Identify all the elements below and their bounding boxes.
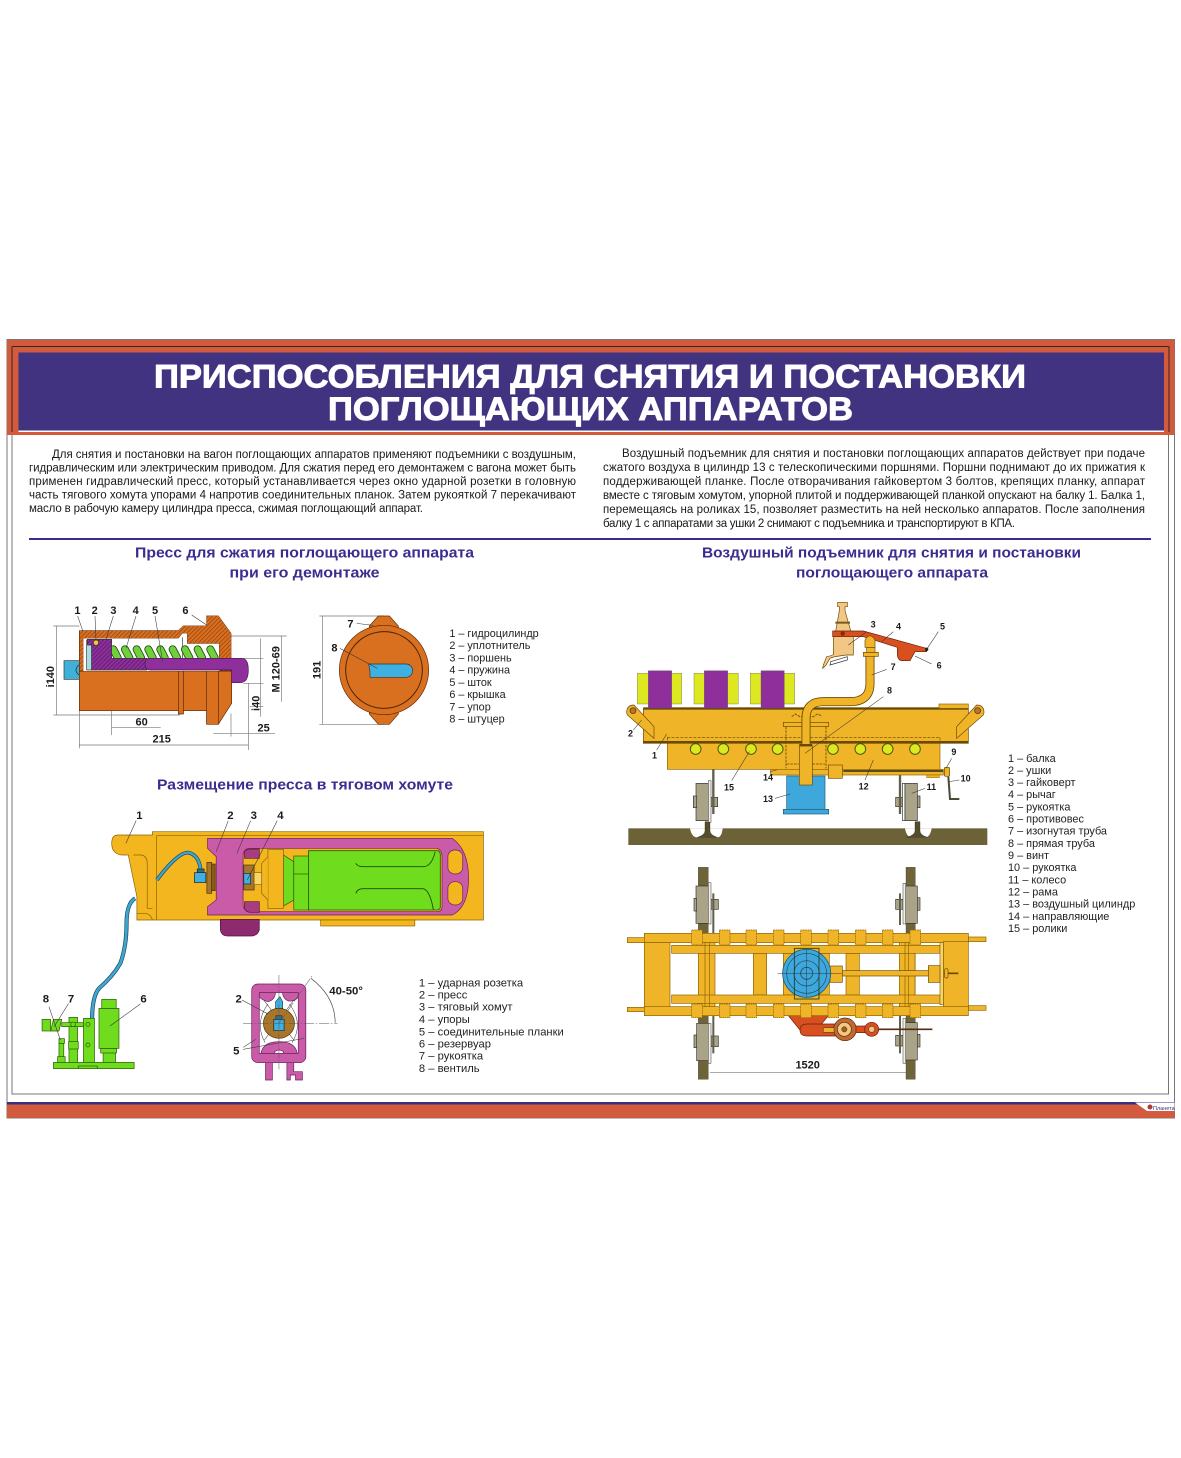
cylinder <box>783 776 829 814</box>
yoke <box>208 838 469 915</box>
yoke window <box>243 848 442 912</box>
text block: intro left: часть тягового хомута упорами 4 напротив соединительных планок. Затем рукояткой 7 перекачивают <box>29 490 577 502</box>
hose and fitting <box>157 853 201 880</box>
panel: hydraulic pump: 8 <box>43 993 49 1005</box>
labels: 1 <box>652 750 657 760</box>
press labels: i40 <box>250 696 262 711</box>
yoke lug <box>220 919 259 936</box>
labels: 9 <box>951 747 956 757</box>
wheels <box>693 783 920 821</box>
labels: 3 <box>251 810 257 822</box>
heading: air lift: поглощающего аппарата <box>796 566 989 582</box>
wheels <box>694 886 920 1061</box>
labels: 4 <box>896 621 901 631</box>
panel: hydraulic pump: 6 <box>140 993 147 1005</box>
panel: yoke cross-section: 5 <box>233 1045 239 1057</box>
legend: air lift: 2 – ушки <box>1008 765 1051 777</box>
press labels: 5 <box>152 605 158 617</box>
legend: press: 3 – поршень <box>449 652 512 664</box>
roller pads <box>692 930 921 1018</box>
legend: press: 6 – крышка <box>449 689 507 701</box>
text block: intro right: Воздушный подъемник для снятия и постановки поглощающих аппаратов действует при подаче <box>622 448 1145 460</box>
posts <box>713 753 900 814</box>
labels <box>628 619 971 804</box>
labels: 7 <box>891 662 896 672</box>
text block: intro left: гидравлическим или электрическим приводом. Для сжатия перед его демонтажем с вагона может быть <box>29 462 576 474</box>
legend: air lift: 8 – прямая труба <box>1008 838 1096 850</box>
coupler body <box>112 832 483 920</box>
text block: intro right: сжатого воздуха в цилиндр 13 с телескопическими поршнями. Поршни поднимают до их прижатия к <box>603 462 1146 474</box>
frame 12 <box>667 737 940 769</box>
ground with rails <box>628 822 987 845</box>
legend: air lift: 6 – противовес <box>1008 814 1084 826</box>
yoke bottom bar <box>321 920 415 926</box>
legend: press: 7 – упор <box>449 701 491 713</box>
labels: 4 <box>277 810 284 822</box>
press labels: 215 <box>153 733 171 745</box>
guides <box>771 765 943 778</box>
rollers <box>690 744 920 754</box>
heading: press placement: Размещение пресса в тяговом хомуте <box>157 778 453 794</box>
supply hose <box>92 898 135 1020</box>
text block: intro right: перемещаясь на роликах 15, позволяет разместить на ней несколько аппаратов. После заполнения <box>603 504 1145 516</box>
press labels <box>45 605 282 745</box>
legend: air lift: 10 – рукоятка <box>1008 862 1077 874</box>
labels: 14 <box>763 772 773 782</box>
loads <box>637 671 795 708</box>
legend: placement: 1 – ударная розетка <box>419 977 524 989</box>
panel: air lift side view <box>627 602 987 845</box>
legend: air lift: 14 – направляющие <box>1008 911 1109 923</box>
upper lid hatch <box>178 616 231 658</box>
legend: placement: 5 – соединительные планки <box>419 1026 564 1038</box>
legend: placement: 3 – тяговый хомут <box>419 1002 513 1014</box>
labels: 6 <box>937 661 942 671</box>
telescopic dashed housing <box>783 714 829 768</box>
poster frame <box>7 340 1176 1118</box>
legend: air lift: 1 – балка <box>1008 753 1057 765</box>
heading: press: Пресс для сжатия поглощающего аппарата <box>135 546 475 562</box>
flange <box>863 636 878 656</box>
crank <box>843 767 959 799</box>
lever assembly <box>788 1016 932 1041</box>
yoke slots <box>448 850 463 905</box>
stops <box>244 865 254 890</box>
nozzle <box>64 661 79 679</box>
legend: press: 8 – штуцер <box>449 713 505 725</box>
legend: placement: 4 – упоры <box>419 1014 470 1026</box>
axles <box>698 867 915 1079</box>
cavity <box>83 633 219 671</box>
press labels: 60 <box>136 717 148 729</box>
panel: hydraulic pump <box>42 993 147 1069</box>
labels <box>126 810 284 880</box>
press labels: 6 <box>182 605 188 617</box>
labels: 3 <box>871 619 876 629</box>
poster frame: Планета <box>1153 1106 1176 1112</box>
straight and bent pipe <box>806 655 870 746</box>
legend: air lift: 13 – воздушный цилиндр <box>1008 898 1135 910</box>
text block: intro right: поддерживающей планке. После отворачивания гайковертом 3 болтов, крепящих планку, аппарат <box>603 476 1146 488</box>
labels: 2 <box>628 729 633 739</box>
panel: air lift top view <box>627 867 986 1079</box>
legend: placement <box>419 977 564 1075</box>
heading: air lift <box>702 546 1081 582</box>
dimension 1520: 1520 <box>795 1060 820 1072</box>
title banner: ПОГЛОЩАЮЩИХ АППАРАТОВ <box>328 391 853 427</box>
beam 1 <box>643 708 968 743</box>
text block: intro right: вместе с тяговым хомутом, упорной плитой и поддерживающей планкой опускают на балку 1. Балка 1, <box>603 490 1145 502</box>
panel: yoke cross-section: 2 <box>236 994 242 1006</box>
press labels: 2 <box>92 605 98 617</box>
legend: air lift: 4 – рычаг <box>1008 789 1056 801</box>
press body <box>283 855 294 906</box>
title banner <box>18 352 1164 430</box>
heading: air lift: Воздушный подъемник для снятия и постановки <box>702 546 1081 562</box>
legend: air lift: 3 – гайковерт <box>1008 777 1076 789</box>
legend: placement: 7 – рукоятка <box>419 1051 484 1063</box>
text block: intro left <box>29 449 577 515</box>
press labels: M 120-69 <box>270 646 282 693</box>
press labels: 1 <box>74 605 80 617</box>
screw <box>830 966 958 982</box>
legend: air lift <box>1008 753 1135 935</box>
upper housing <box>79 616 231 671</box>
press labels: 3 <box>110 605 116 617</box>
impact wrench <box>823 602 853 668</box>
legend: air lift: 11 – колесо <box>1008 874 1066 886</box>
heading: press <box>135 546 475 582</box>
panel: press end view: 191 <box>312 661 324 679</box>
seal ring <box>93 640 99 645</box>
seal column <box>87 640 92 670</box>
rod <box>145 658 248 683</box>
legend: air lift: 15 – ролики <box>1008 923 1067 935</box>
text block: intro right <box>603 448 1146 530</box>
labels: 11 <box>927 782 936 792</box>
legend: press: 2 – уплотнитель <box>449 640 531 652</box>
legend: air lift: 5 – рукоятка <box>1008 802 1071 814</box>
lower body <box>79 671 232 724</box>
text block: intro left: применен гидравлический пресс, который устанавливается через окно ударной розетки в головную <box>29 476 576 488</box>
piston <box>87 639 147 670</box>
heading: press: при его демонтаже <box>230 566 380 582</box>
text block: intro right: балку 1 с аппаратами за ушки 2 снимают с подъемника и транспортируют в КПА. <box>603 518 1015 530</box>
labels: 10 <box>961 774 971 784</box>
legend: press: 5 – шток <box>449 677 492 689</box>
panel: press end view: 8 <box>331 642 337 654</box>
panel: press section diagram <box>45 605 287 750</box>
text block: intro left: Для снятия и постановки на вагон поглощающих аппаратов применяют подъемники с воздушным, <box>52 449 576 461</box>
press labels: 25 <box>258 722 270 734</box>
panel: press in draft yoke <box>92 810 483 1020</box>
legend: placement: 8 – вентиль <box>419 1063 480 1075</box>
legend: air lift: 7 – изогнутая труба <box>1008 826 1108 838</box>
labels: 13 <box>763 794 773 804</box>
panel: press end view <box>312 616 429 724</box>
press labels: i140 <box>45 666 57 687</box>
press labels: 4 <box>133 605 140 617</box>
panel: hydraulic pump: 7 <box>68 993 74 1005</box>
labels: 2 <box>227 810 234 822</box>
labels: 1 <box>136 810 143 822</box>
cylinder top <box>778 948 842 999</box>
legend: placement: 2 – пресс <box>419 990 468 1002</box>
panel: press end view: 7 <box>347 619 353 631</box>
text block: intro left: масло в рабочую камеру цилиндра пресса, сжимая поглощающий аппарат. <box>29 503 423 515</box>
title banner: ПРИСПОСОБЛЕНИЯ ДЛЯ СНЯТИЯ И ПОСТАНОВКИ <box>154 358 1026 394</box>
dimension lines <box>53 626 287 750</box>
spring <box>113 649 215 658</box>
ears <box>627 705 654 738</box>
lever <box>833 631 927 661</box>
labels: 15 <box>724 782 734 792</box>
legend: press: 1 – гидроцилиндр <box>449 628 539 640</box>
legend: air lift: 12 – рама <box>1008 886 1059 898</box>
legend: placement: 6 – резервуар <box>419 1038 491 1050</box>
panel: yoke cross-section: 40-50° <box>329 985 363 997</box>
labels: 12 <box>859 781 869 791</box>
legend: air lift: 9 – винт <box>1008 850 1049 862</box>
labels: 5 <box>940 621 945 631</box>
legend: press <box>449 628 539 725</box>
panel: yoke cross-section <box>233 975 363 1080</box>
labels: 8 <box>887 686 892 696</box>
legend: press: 4 – пружина <box>449 665 511 677</box>
stubs and rails <box>627 933 986 1016</box>
